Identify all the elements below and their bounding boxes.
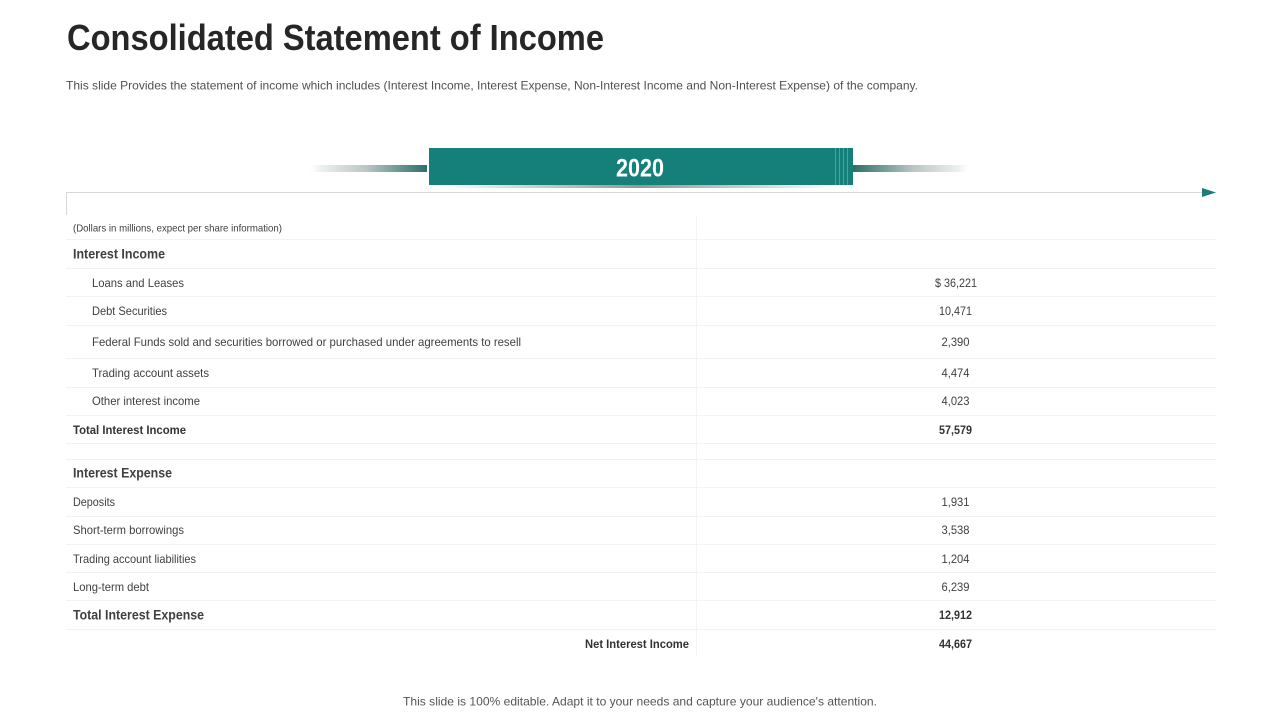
section: interest income: 4,474 (942, 366, 970, 380)
section: interest income: Debt Securities (92, 304, 167, 318)
net interest income row (585, 637, 972, 651)
section: interest income: Other interest income (92, 394, 200, 408)
section: interest income: Federal Funds sold and securities borrowed or purchased under agreements to resell (92, 335, 521, 349)
section: interest income: 2,390 (942, 335, 970, 349)
section: interest income: Trading account assets (92, 366, 209, 380)
section: interest expense: Deposits (73, 495, 115, 509)
net interest income row: 44,667 (939, 637, 972, 651)
subtitle: This slide Provides the statement of income which includes (Interest Income, Interest Expense, Non-Interest Income and Non-Interest Expense) of the company. (66, 78, 918, 92)
timeline arrow (66, 188, 1216, 215)
income statement table (66, 215, 1216, 657)
section: interest income: Interest Income (73, 246, 165, 262)
section: interest income: Loans and Leases (92, 276, 184, 290)
section: interest expense: Interest Expense (73, 464, 172, 480)
table note: (Dollars in millions, expect per share information) (73, 222, 282, 234)
year label: 2020 (616, 154, 664, 182)
section: interest income: 10,471 (939, 304, 972, 318)
section: interest expense: Total Interest Expense (73, 606, 204, 622)
section: interest expense: Short-term borrowings (73, 523, 184, 537)
section: interest income: 4,023 (942, 394, 970, 408)
section: interest expense: 3,538 (942, 523, 970, 537)
section: interest income: Total Interest Income (73, 423, 186, 437)
section: interest expense: 6,239 (942, 580, 970, 594)
section: interest income: $ 36,221 (935, 276, 977, 290)
footer note: This slide is 100% editable. Adapt it to your needs and capture your audience's attention. (403, 694, 877, 708)
year banner (306, 148, 973, 188)
section: interest income: 57,579 (939, 423, 972, 437)
net interest income row: Net Interest Income (585, 637, 689, 651)
title: Consolidated Statement of Income (67, 17, 604, 58)
section: interest expense: Trading account liabilities (73, 552, 196, 566)
section: interest expense: 1,931 (942, 495, 970, 509)
section: interest income (73, 246, 977, 437)
section: interest expense: 1,204 (942, 552, 970, 566)
section: interest expense (73, 464, 972, 622)
section: interest expense: Long-term debt (73, 580, 150, 594)
section: interest expense: 12,912 (939, 608, 972, 622)
